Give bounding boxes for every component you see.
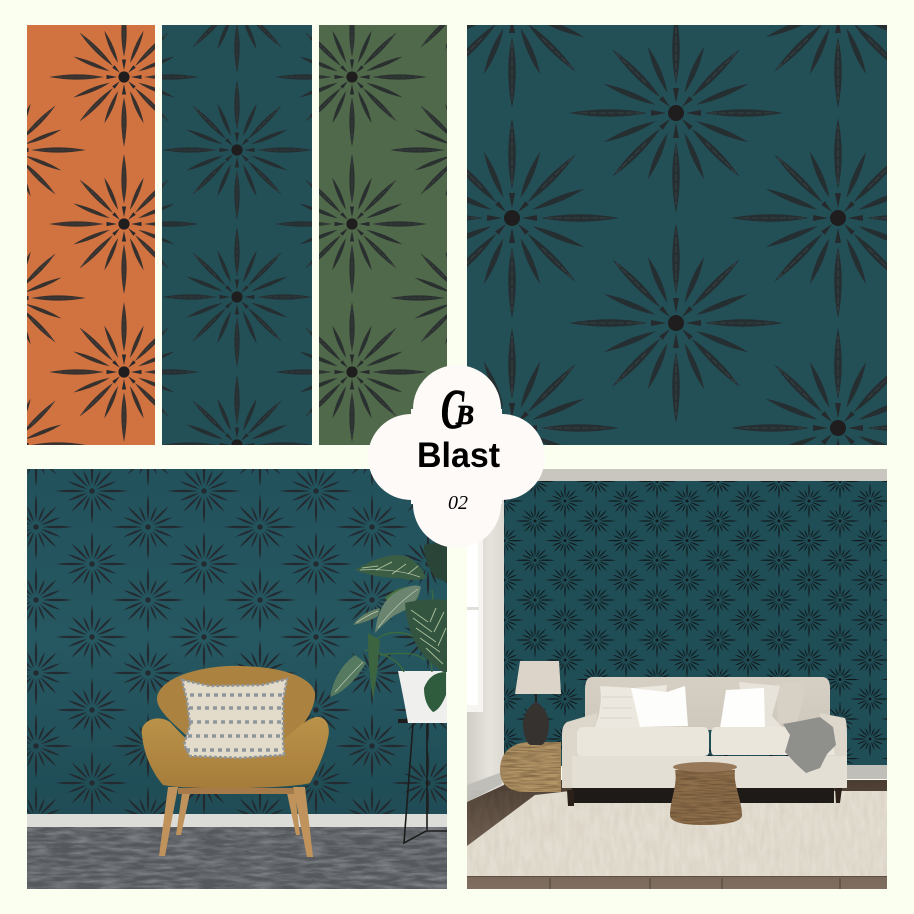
sofa arms bbox=[562, 713, 597, 788]
quatrefoil shape bbox=[368, 365, 545, 548]
chair legs bbox=[159, 787, 313, 857]
plant pot bbox=[398, 671, 447, 723]
panel: room scene with sofa bbox=[467, 469, 887, 889]
armchair bbox=[142, 666, 329, 857]
throw blanket bbox=[783, 717, 836, 773]
woven stool bbox=[670, 762, 742, 825]
panel: green swatch bbox=[319, 25, 447, 445]
jute pouf side table bbox=[500, 742, 561, 792]
window bbox=[467, 530, 483, 712]
side wall bbox=[467, 481, 505, 801]
number: 02 bbox=[448, 492, 468, 514]
chair back bbox=[157, 666, 315, 744]
panel: teal swatch bbox=[162, 25, 312, 445]
sofa shadow and legs bbox=[567, 786, 842, 806]
plant bbox=[330, 542, 447, 712]
panel: large pattern detail bbox=[467, 25, 887, 445]
baseboard bbox=[27, 814, 447, 827]
wallpapered wall bbox=[504, 481, 887, 766]
plant stand bbox=[398, 721, 447, 843]
wallpapered wall bbox=[0, 421, 464, 852]
seat cushions bbox=[577, 727, 709, 756]
baseboards bbox=[467, 765, 887, 802]
panel: orange swatch bbox=[27, 25, 155, 445]
chair seat and arms bbox=[142, 717, 329, 788]
logo badge bbox=[368, 365, 545, 548]
sofa back bbox=[585, 677, 830, 730]
sofa base bbox=[572, 756, 847, 788]
monogram: B bbox=[455, 400, 474, 430]
table lamp bbox=[515, 661, 561, 745]
pillows bbox=[595, 681, 804, 728]
cream rug bbox=[467, 791, 887, 876]
cushion bbox=[182, 679, 287, 758]
grey rug bbox=[27, 827, 447, 889]
sofa bbox=[562, 677, 847, 806]
ceiling band bbox=[467, 469, 887, 481]
wood floor bbox=[467, 780, 887, 889]
title: Blast bbox=[417, 436, 500, 475]
panel: room scene with armchair bbox=[27, 469, 447, 889]
monogram: C bbox=[441, 379, 465, 441]
